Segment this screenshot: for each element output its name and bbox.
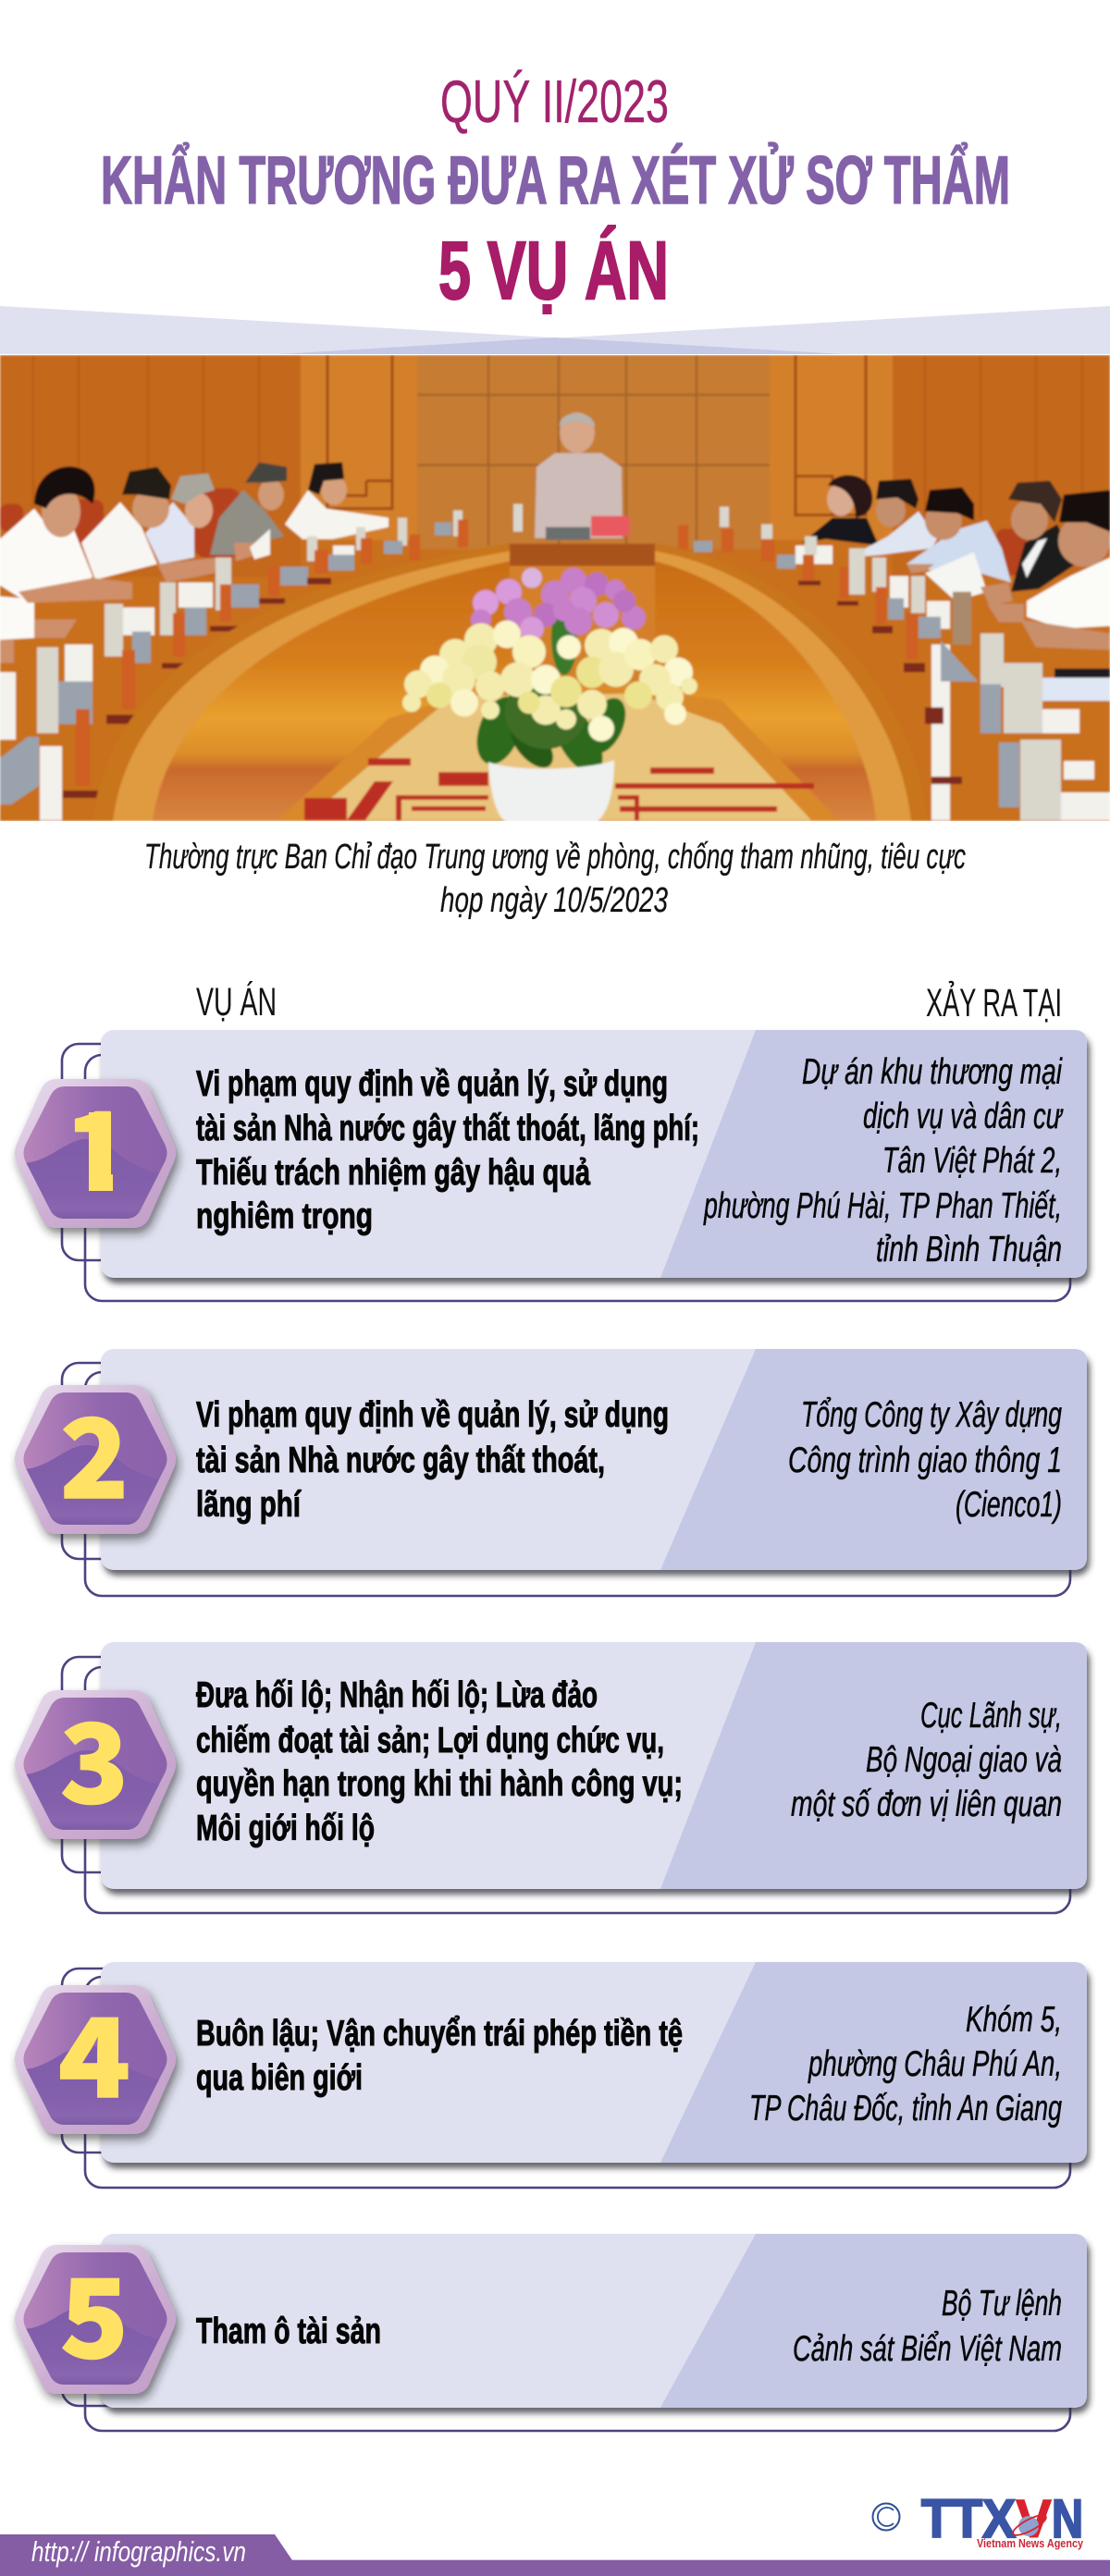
title: 5 VỤ ÁN: [438, 224, 669, 316]
title: QUÝ II/2023: [440, 67, 669, 135]
case 1 number badge: [15, 1064, 176, 1228]
case 3: [15, 1642, 1087, 1913]
pot: [488, 760, 614, 821]
case 3 card: [101, 1642, 1087, 1889]
case 5 number badge: [15, 2231, 176, 2394]
case 2 offence text: tài sản Nhà nước gây thất thoát,: [196, 1441, 605, 1480]
right delegates: [802, 475, 1110, 650]
case 4 offence text: Buôn lậu; Vận chuyển trái phép tiền tệ: [196, 2014, 683, 2054]
case 3 offence text: chiếm đoạt tài sản; Lợi dụng chức vụ,: [196, 1721, 664, 1760]
case 5 location text: [793, 2284, 1062, 2369]
case 3 offence text: Đưa hối lộ; Nhận hối lộ; Lừa đảo: [196, 1675, 598, 1715]
photo: meeting room: [0, 355, 1110, 821]
case 2 offence text: lãng phí: [196, 1485, 302, 1525]
footer url: http:// infographics.vn: [31, 2535, 246, 2568]
footer bar: [0, 2534, 1110, 2576]
case 2 number badge: 2: [60, 1371, 129, 1529]
yellow orchids: [402, 620, 697, 742]
case 4 number badge: 4: [58, 1970, 130, 2128]
case 1: [15, 1030, 1087, 1301]
case 3 location panel: [660, 1642, 1087, 1889]
case 3 number badge: [15, 1676, 176, 1839]
case 3 offence text: quyền hạn trong khi thi hành công vụ;: [196, 1764, 683, 1804]
case 1 offence text: Vi phạm quy định về quản lý, sử dụng: [196, 1064, 668, 1104]
carpet: [278, 689, 839, 820]
case 2 location text: (Cienco1): [956, 1485, 1062, 1525]
case 4: [15, 1962, 1087, 2188]
left delegates: [0, 462, 388, 663]
case 2: [15, 1349, 1087, 1596]
case 5: [15, 2231, 1087, 2431]
case 2 offence text: Vi phạm quy định về quản lý, sử dụng: [196, 1395, 669, 1435]
case 3 offence text: [196, 1675, 683, 1848]
logo: TTXVN: N: [1052, 2489, 1083, 2549]
pink orchids: [471, 568, 646, 641]
caption: [144, 838, 966, 920]
case 3 number badge: 3: [60, 1676, 129, 1834]
case 2 card: [101, 1349, 1087, 1570]
case 1 number badge: 1: [65, 1064, 131, 1222]
case 3 offence text: Môi giới hối lộ: [196, 1809, 375, 1848]
logo: TTXVN: TTX: [921, 2489, 1016, 2549]
case 2 location text: [788, 1395, 1062, 1525]
caption: họp ngày 10/5/2023: [440, 881, 668, 920]
case 4 location text: [749, 2000, 1062, 2128]
case 5 offence text: Tham ô tài sản: [196, 2312, 381, 2351]
logo: TTXVN: V: [1016, 2489, 1052, 2549]
case 1 offence text: nghiêm trọng: [196, 1196, 373, 1236]
case 4 offence text: qua biên giới: [196, 2058, 363, 2098]
logo: TTXVN: Vietnam News Agency: [977, 2536, 1084, 2550]
title ribbon band: [0, 306, 1110, 354]
case 2 number badge: [15, 1371, 176, 1534]
case 2 offence text: [196, 1395, 669, 1525]
wall panels: [0, 355, 1110, 577]
icon: copyright mark: [873, 2504, 899, 2530]
case 4 offence text: [196, 2014, 683, 2098]
column header: VỤ ÁN: VỤ ÁN: [196, 980, 277, 1024]
case 5 number badge: 5: [60, 2231, 129, 2389]
leaves: [475, 618, 627, 769]
case 4 card: [101, 1962, 1087, 2163]
center speaker: [535, 412, 630, 540]
case 1 location text: [703, 1052, 1064, 1270]
case 5 location panel: [660, 2234, 1087, 2408]
case 2 location panel: [660, 1349, 1087, 1570]
table items: [0, 504, 1110, 820]
arch of table: [95, 544, 688, 799]
title: [101, 67, 1010, 316]
chairs: [0, 488, 1026, 575]
case 4 number badge: [15, 1970, 176, 2134]
case 4 location panel: [660, 1962, 1087, 2163]
orchid arrangement: [402, 568, 697, 821]
case 1 location panel: [660, 1030, 1087, 1278]
case 1 card: [101, 1030, 1087, 1278]
case 5 card: [101, 2234, 1087, 2408]
case 4 location text: Khóm 5,: [966, 2000, 1062, 2040]
case 1 offence text: [196, 1064, 699, 1236]
case 1 offence text: tài sản Nhà nước gây thất thoát, lãng phí;: [196, 1109, 699, 1148]
case 1 offence text: Thiếu trách nhiệm gây hậu quả: [196, 1153, 590, 1193]
logo: TTXVN: [873, 2489, 1084, 2550]
case 3 location text: [791, 1696, 1062, 1824]
